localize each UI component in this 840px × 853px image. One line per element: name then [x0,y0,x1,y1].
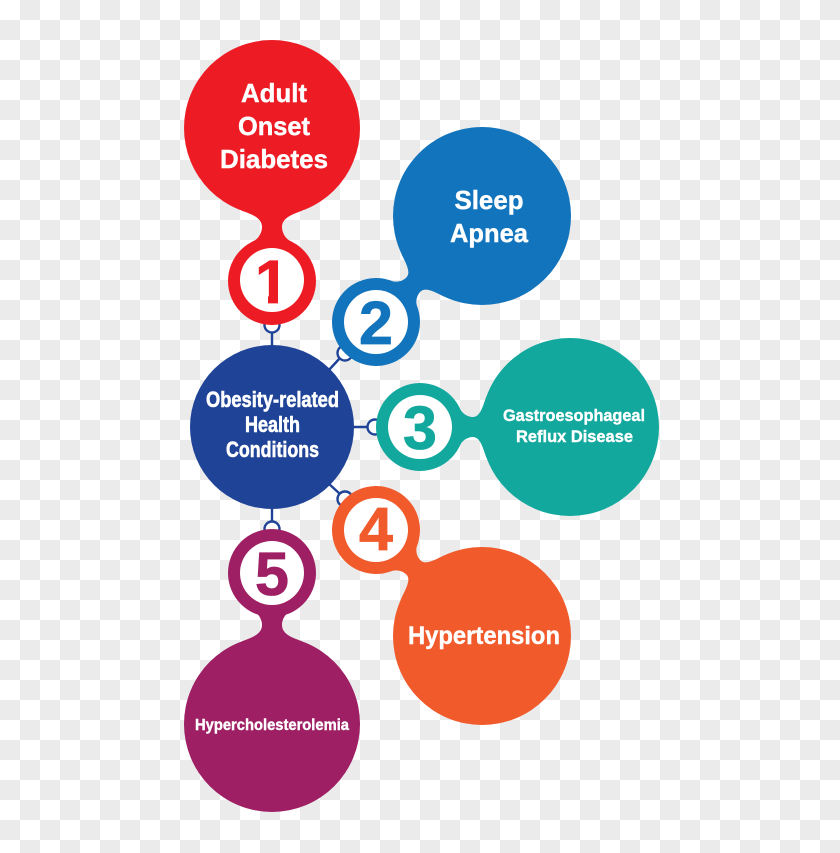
number 5: 5 [255,540,289,608]
heading: obesity-related health conditions [206,387,339,462]
connectors between the centre circle and numbered circles [264,318,382,536]
label: sleep apnea: Sleep [454,185,524,215]
number 2: 2 [359,289,393,357]
panel: hypertension [332,486,571,725]
label: adult onset diabetes: Diabetes [220,144,328,174]
panel: gastroesophageal reflux disease [376,338,659,516]
label: gastroesophageal reflux disease: Reflux Disease [516,427,633,446]
label: adult onset diabetes: Adult [241,78,307,108]
panel: sleep apnea [332,127,571,366]
heading: obesity-related health conditions: Health [245,412,300,437]
label: gastroesophageal reflux disease [503,406,645,446]
number 4: 4 [359,495,393,563]
heading: obesity-related health conditions: Obesity-related [206,387,339,412]
number 1: 1 [255,248,289,316]
label: sleep apnea: Apnea [450,218,529,248]
label: hypertension: Hypertension [408,622,560,650]
panel: adult onset diabetes [184,40,360,325]
number 3: 3 [403,394,437,462]
panel: centre circle, obesity-related health conditions [190,345,354,509]
label: hypercholesterolemia: Hypercholesterolemia [195,717,349,734]
label: adult onset diabetes [220,78,328,174]
label: gastroesophageal reflux disease: Gastroesophageal [503,406,645,425]
heading: obesity-related health conditions: Conditions [226,437,319,462]
label: sleep apnea [450,185,529,248]
label: adult onset diabetes: Onset [238,111,310,141]
panel: hypercholesterolemia [184,529,360,812]
